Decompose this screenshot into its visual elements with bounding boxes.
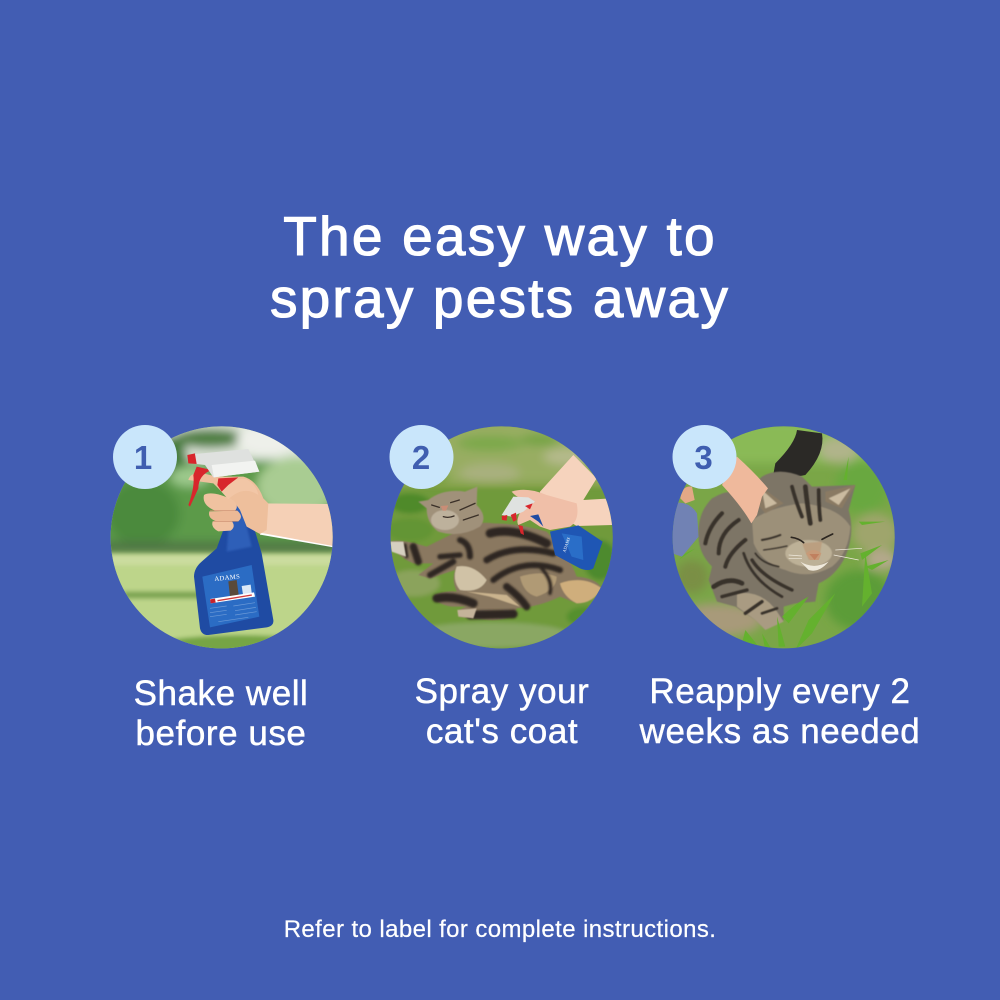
step 3 caption bbox=[639, 672, 920, 751]
fingers bbox=[680, 486, 695, 503]
step 3 caption: weeks as needed bbox=[640, 712, 920, 751]
badge 3: 3 bbox=[694, 439, 713, 476]
badge 2 bbox=[390, 425, 454, 489]
footnote: Refer to label for complete instructions. bbox=[284, 916, 716, 943]
photo: hand holding spray bottle: ADAMS bbox=[214, 573, 240, 583]
badge 2: 2 bbox=[412, 439, 430, 476]
badge 3 bbox=[672, 425, 736, 489]
cat body bbox=[390, 523, 602, 620]
sprayer head bbox=[195, 449, 259, 477]
badge 1 bbox=[113, 425, 177, 489]
trigger red bbox=[188, 467, 212, 507]
step 1 caption: Shake well bbox=[134, 674, 308, 713]
step 1 caption bbox=[134, 674, 308, 753]
photo: spraying cat on grass: ADAMS bbox=[562, 536, 571, 553]
step 1 caption: before use bbox=[136, 714, 306, 753]
badge 1: 1 bbox=[134, 439, 152, 476]
step 2 caption bbox=[415, 672, 589, 751]
photo: spraying cat on grass bbox=[390, 426, 613, 648]
photo: relaxed cat being petted bbox=[672, 426, 895, 648]
title: The easy way to bbox=[283, 205, 717, 267]
arm bbox=[540, 455, 612, 526]
cat head bbox=[418, 487, 483, 534]
tail bbox=[774, 430, 822, 476]
arm bbox=[260, 503, 333, 547]
bottle bbox=[550, 525, 603, 570]
step 2 caption: Spray your bbox=[415, 672, 589, 711]
title: spray pests away bbox=[270, 267, 730, 329]
cat bbox=[698, 472, 855, 630]
hand on cat bbox=[722, 457, 768, 523]
grass blades bbox=[679, 457, 889, 650]
step illustrations bbox=[110, 425, 895, 648]
bottle bbox=[194, 495, 273, 635]
jeans bbox=[672, 503, 699, 557]
title bbox=[270, 205, 730, 329]
hand bbox=[188, 473, 268, 534]
photo: hand holding spray bottle bbox=[110, 426, 333, 648]
cat face bbox=[791, 534, 833, 543]
step 2 caption: cat's coat bbox=[426, 712, 578, 751]
step 3 caption: Reapply every 2 bbox=[649, 672, 911, 711]
